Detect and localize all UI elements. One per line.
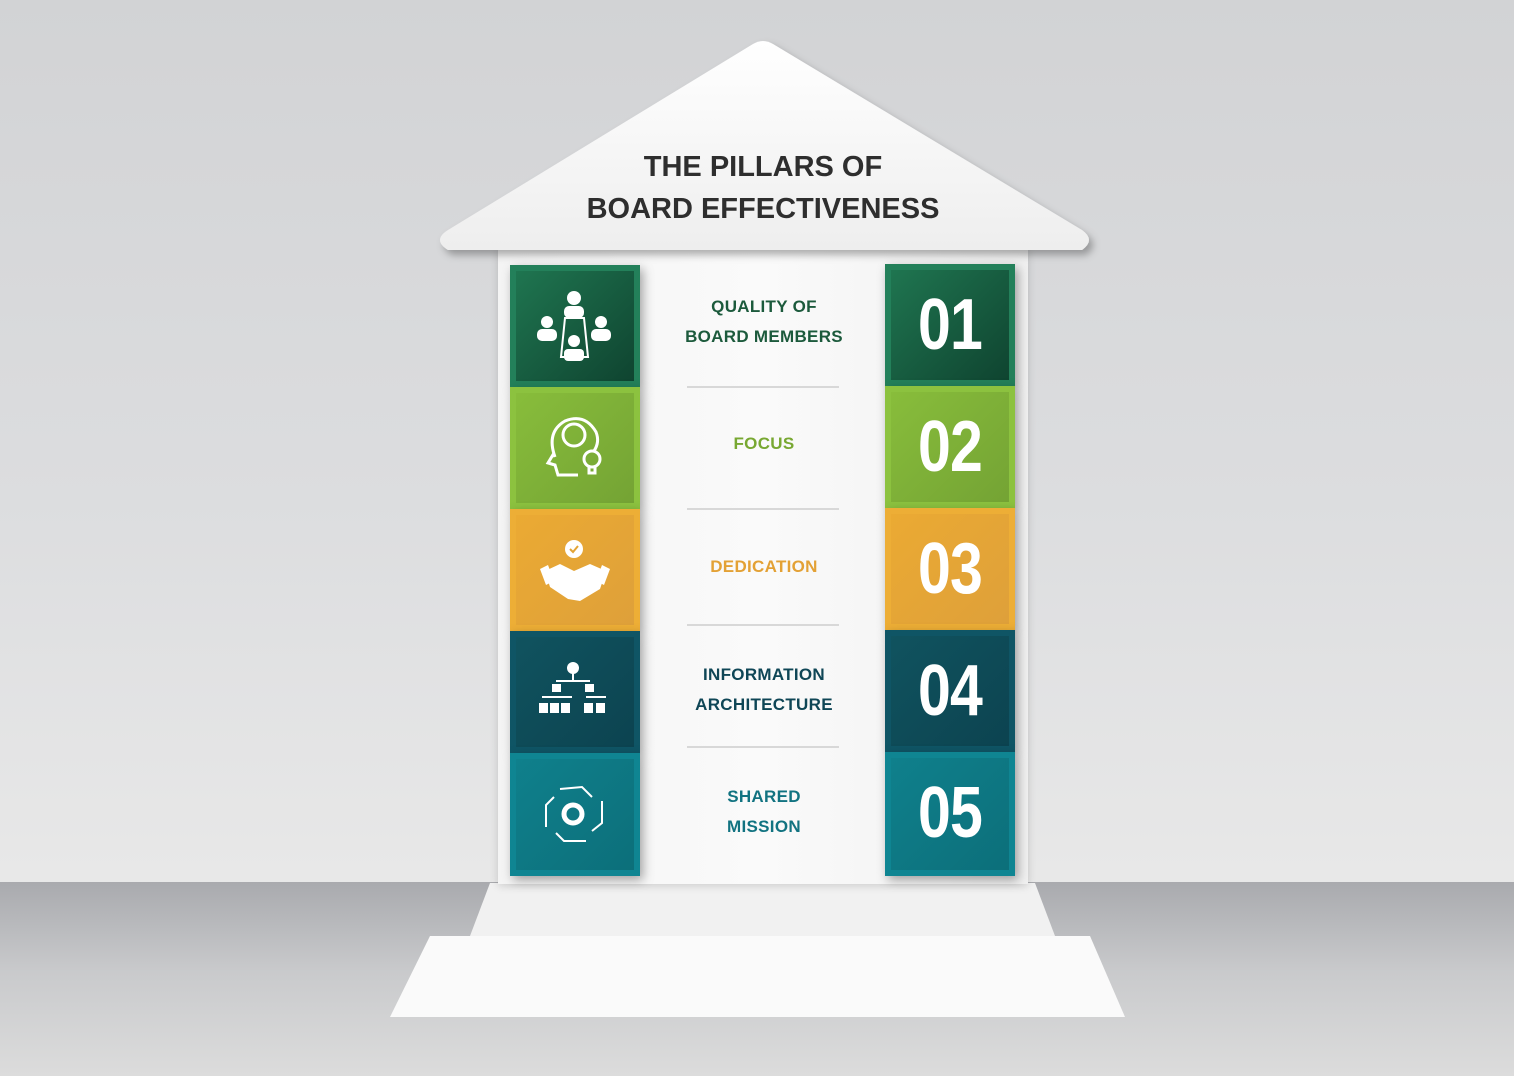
label 1 bbox=[685, 297, 843, 346]
building body bbox=[498, 248, 1028, 884]
pillar right: numbers bbox=[882, 262, 1024, 886]
icon cell: board members bbox=[510, 265, 640, 387]
label 4: INFORMATION bbox=[703, 665, 825, 684]
number 04: 04 bbox=[918, 651, 982, 731]
label 1: QUALITY OF bbox=[711, 297, 817, 316]
pillar left: icons bbox=[506, 262, 650, 886]
icon cell: focus bbox=[510, 387, 640, 509]
number 04 bbox=[885, 630, 1015, 752]
title: BOARD EFFECTIVENESS bbox=[587, 193, 939, 225]
number 05 bbox=[885, 752, 1015, 876]
icon cell: shared mission bbox=[510, 753, 640, 876]
label 4 bbox=[695, 665, 833, 714]
number 05: 05 bbox=[918, 773, 982, 853]
icon cell: architecture bbox=[510, 631, 640, 753]
number 02 bbox=[885, 386, 1015, 508]
title: THE PILLARS OF bbox=[644, 151, 882, 183]
number 01 bbox=[885, 264, 1015, 386]
roof bbox=[440, 41, 1096, 260]
label 5: MISSION bbox=[727, 817, 801, 836]
number 01: 01 bbox=[918, 285, 982, 365]
icon cell: dedication bbox=[510, 509, 640, 631]
label 3: DEDICATION bbox=[710, 557, 818, 576]
title bbox=[587, 151, 939, 225]
label 1: BOARD MEMBERS bbox=[685, 327, 843, 346]
label 4: ARCHITECTURE bbox=[695, 695, 833, 714]
label 5: SHARED bbox=[727, 787, 801, 806]
number 02: 02 bbox=[918, 407, 982, 487]
label 2: FOCUS bbox=[734, 434, 794, 453]
number 03: 03 bbox=[918, 529, 982, 609]
number 03 bbox=[885, 508, 1015, 630]
label 5 bbox=[727, 787, 801, 836]
